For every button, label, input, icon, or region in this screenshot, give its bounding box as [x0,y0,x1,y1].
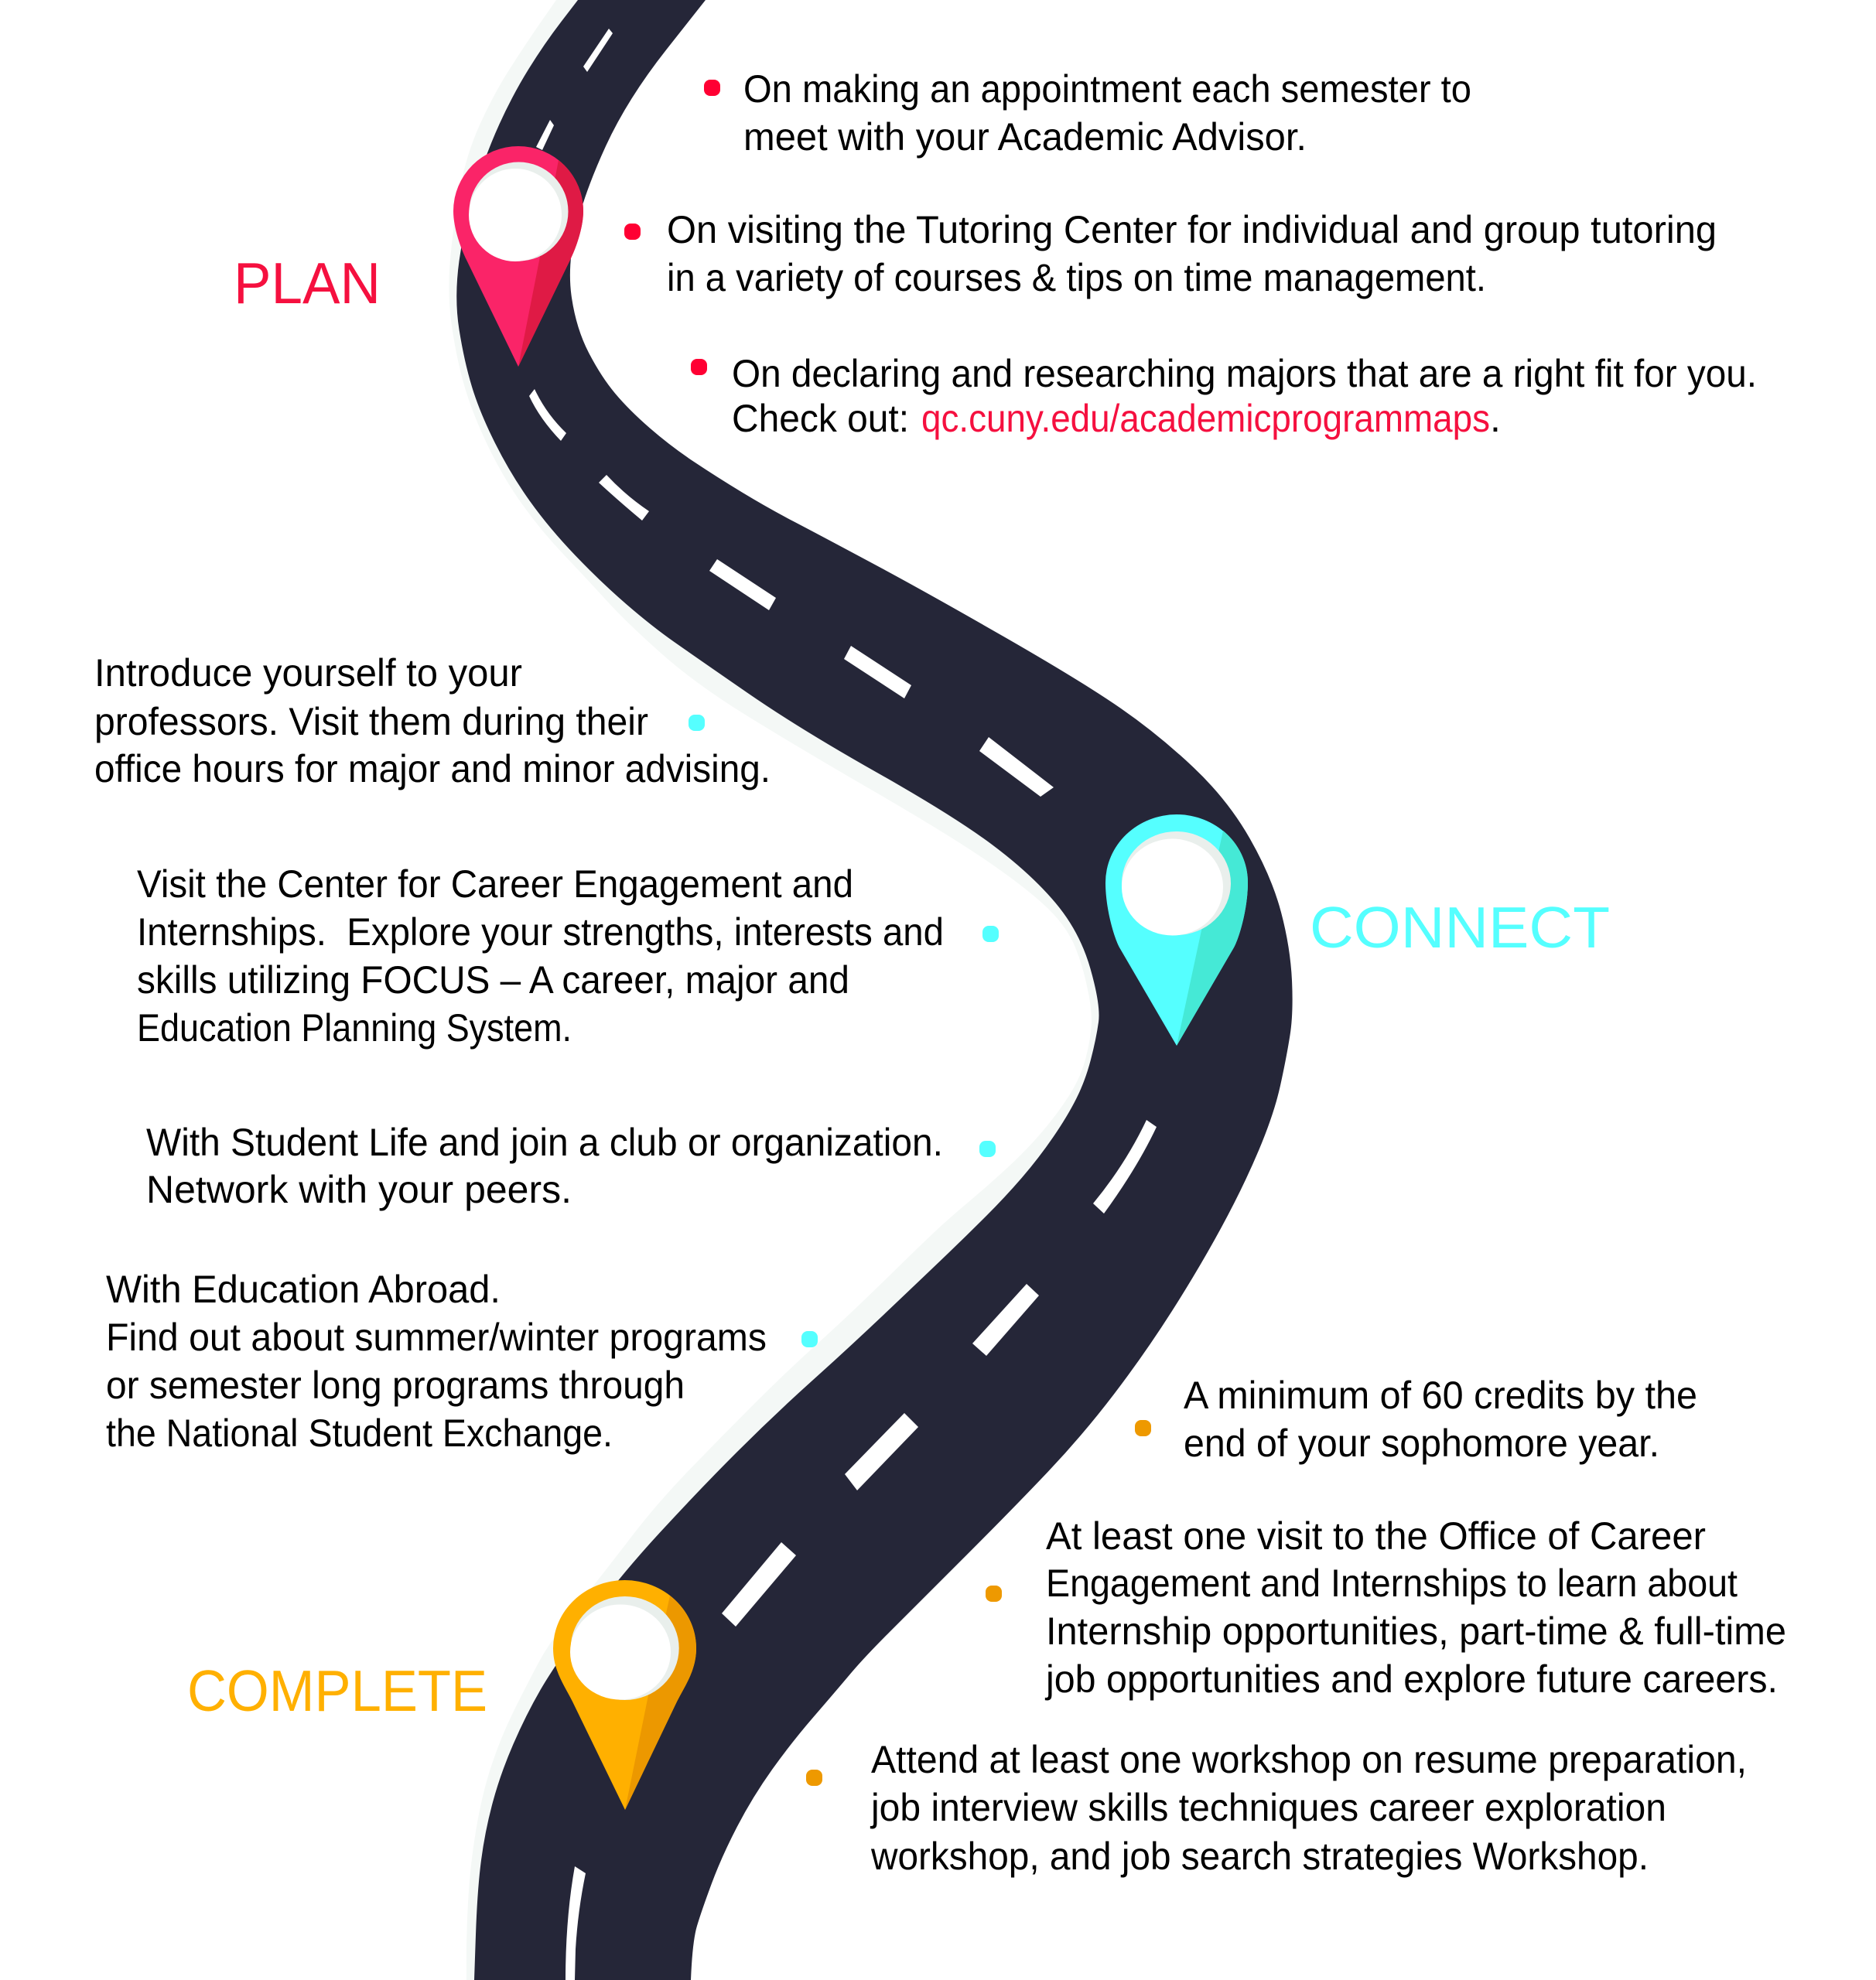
road with shadow and lane markings [449,0,1293,1980]
text: meet with your Academic Advisor. [743,115,1307,159]
lane markings [529,29,1157,1980]
text: the National Student Exchange. [106,1412,613,1455]
bullet [979,1141,996,1157]
road surface [456,0,1293,1980]
text: At least one visit to the Office of Career [1046,1514,1706,1558]
bullet [1135,1420,1151,1436]
bullet [801,1331,818,1347]
text [732,352,1757,440]
text [146,1121,943,1211]
text: A minimum of 60 credits by the [1184,1374,1697,1417]
complete item: career office visit [986,1514,1786,1701]
complete item: credits [1135,1374,1697,1465]
pin: complete [553,1580,696,1810]
text: or semester long programs through [106,1364,685,1407]
text: Internship opportunities, part-time & full-time [1046,1610,1786,1653]
text: Engagement and Internships to learn about [1046,1562,1738,1605]
text [667,208,1717,299]
connect item: career center [137,862,999,1050]
bullet [982,926,999,942]
text: On declaring and researching majors that are a right fit for you. [732,352,1757,395]
text: end of your sophomore year. [1184,1422,1659,1465]
text: Attend at least one workshop on resume preparation, [871,1738,1747,1781]
text: With Student Life and join a club or organization. [146,1121,943,1164]
text: Visit the Center for Career Engagement and [137,862,853,906]
text: Find out about summer/winter programs [106,1316,767,1359]
text: Network with your peers. [146,1168,572,1211]
bullet [689,715,705,731]
plan item: majors [691,352,1757,440]
text: With Education Abroad. [106,1268,501,1311]
text: Check out: [732,397,909,440]
bullet [806,1770,822,1786]
text [1044,1514,1786,1701]
text: On visiting the Tutoring Center for individual and group tutoring [667,208,1717,251]
heading: PLAN: PLAN [234,251,381,316]
text: professors. Visit them during their [94,700,648,743]
text: Education Planning System. [137,1006,572,1050]
bullet [691,359,707,375]
text: . [1490,397,1501,440]
text [743,67,1471,159]
bullet [704,80,720,96]
pin: connect [1105,814,1248,1046]
text: workshop, and job search strategies Workshop. [870,1835,1649,1878]
text: Internships. Explore your strengths, interests and [137,910,944,954]
text [137,862,944,1050]
complete item: workshops [806,1738,1747,1878]
connect item: professors [94,651,771,790]
text: On making an appointment each semester to [743,67,1471,111]
text [870,1738,1747,1878]
bullet [624,224,641,240]
text: office hours for major and minor advising. [94,747,771,790]
text [94,651,771,790]
text: Introduce yourself to your [94,651,522,695]
connect item: student life [146,1121,996,1211]
text [1184,1374,1697,1465]
road shadow [449,0,1160,1980]
text: in a variety of courses & tips on time management. [667,256,1486,299]
text: job opportunities and explore future careers. [1044,1657,1778,1701]
text: qc.cuny.edu/academicprogrammaps [921,397,1490,440]
text [106,1268,767,1455]
bullet [986,1586,1002,1602]
heading: CONNECT: CONNECT [1310,895,1610,960]
pin: plan [453,146,583,367]
text: skills utilizing FOCUS – A career, major and [137,958,849,1002]
plan item: tutoring center [624,208,1717,299]
plan item: academic advisor [704,67,1471,159]
text: job interview skills techniques career exploration [870,1786,1666,1829]
heading: COMPLETE: COMPLETE [187,1658,487,1723]
connect item: education abroad [106,1268,818,1455]
